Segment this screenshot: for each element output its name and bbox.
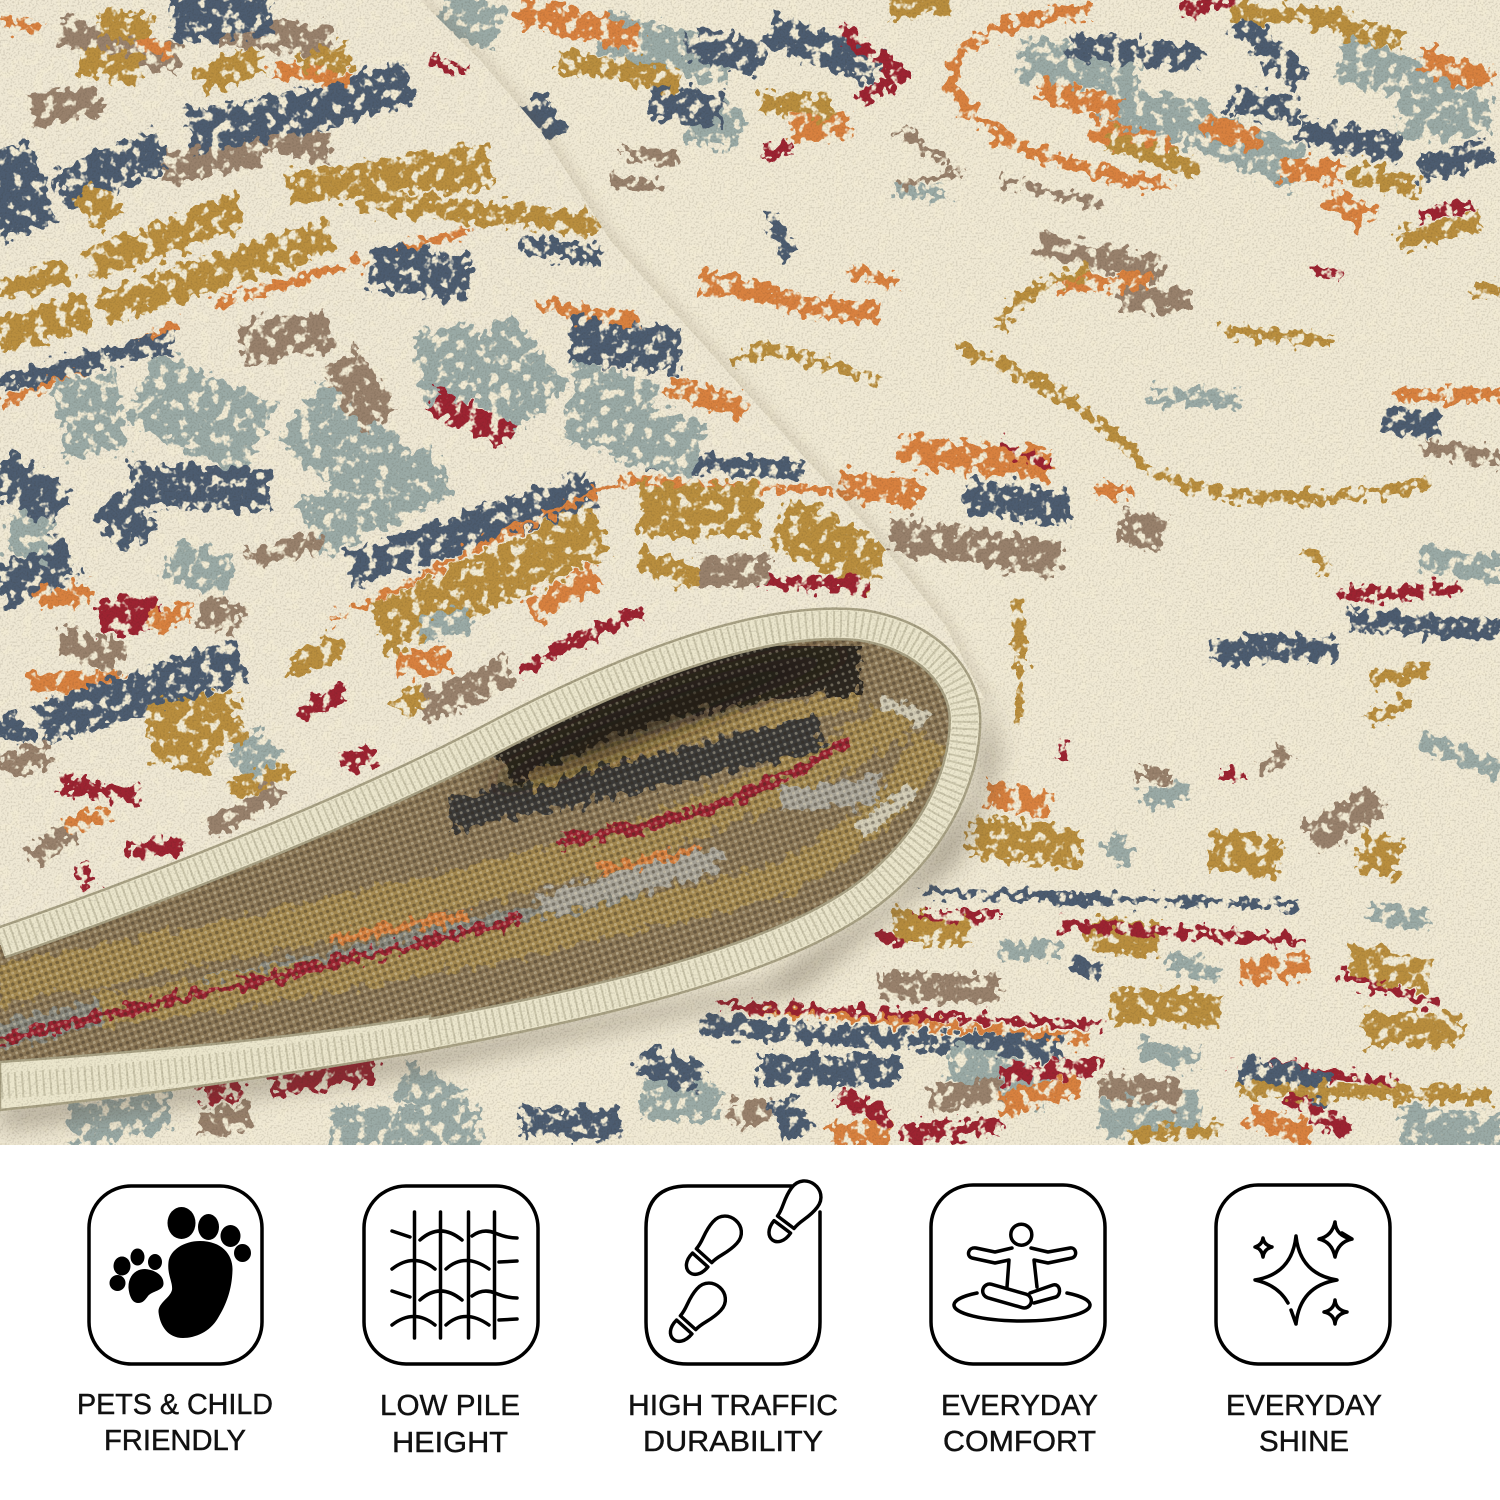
bottom strip xyxy=(70,1060,1500,1135)
upper-right medallion xyxy=(952,0,1490,275)
feature: pets and child friendly xyxy=(77,1186,273,1457)
label: FRIENDLY xyxy=(104,1425,246,1457)
icon: sparkles xyxy=(1216,1185,1390,1364)
centre floral sprays xyxy=(700,130,1430,498)
icon: woven grid xyxy=(364,1186,538,1364)
feature: everyday comfort xyxy=(931,1185,1105,1458)
label: PETS & CHILD xyxy=(77,1389,273,1421)
label: EVERYDAY xyxy=(1226,1390,1382,1422)
label: HIGH TRAFFIC xyxy=(628,1390,838,1422)
lower ochre border xyxy=(300,480,880,710)
flat rug surface xyxy=(0,0,1500,1146)
icon: meditating person xyxy=(931,1185,1105,1364)
cast shadow of roll xyxy=(0,690,1000,1130)
rolled top surface xyxy=(0,0,1000,1000)
label: HEIGHT xyxy=(392,1427,508,1459)
underside weave xyxy=(0,640,948,1061)
lower border bands xyxy=(700,892,1460,1085)
white feature panel xyxy=(0,1145,1500,1500)
lower field ochre patches xyxy=(970,600,1430,920)
icon: footprints xyxy=(646,1175,827,1364)
feature: low pile height xyxy=(364,1186,538,1459)
medallion band xyxy=(0,245,800,590)
icon: foot and paw xyxy=(89,1186,262,1364)
feature: everyday shine xyxy=(1216,1185,1390,1458)
mid flower xyxy=(840,445,1165,560)
upper field xyxy=(0,5,470,230)
label: SHINE xyxy=(1259,1426,1349,1458)
edge shadow of roll on flat rug xyxy=(420,0,985,700)
lower-left field xyxy=(0,530,375,885)
right-edge motifs xyxy=(1210,290,1500,770)
ochre band xyxy=(0,160,600,405)
label: LOW PILE xyxy=(380,1390,520,1422)
pile grain xyxy=(0,0,1500,1145)
top-centre motif xyxy=(440,0,950,190)
feature: high traffic durability xyxy=(628,1175,838,1458)
label: EVERYDAY xyxy=(941,1390,1098,1422)
rug photo xyxy=(0,0,1500,1146)
label: COMFORT xyxy=(943,1426,1096,1458)
dark shadow inside opening xyxy=(480,650,860,790)
label: DURABILITY xyxy=(643,1426,823,1458)
cream binding edge xyxy=(0,624,965,1110)
